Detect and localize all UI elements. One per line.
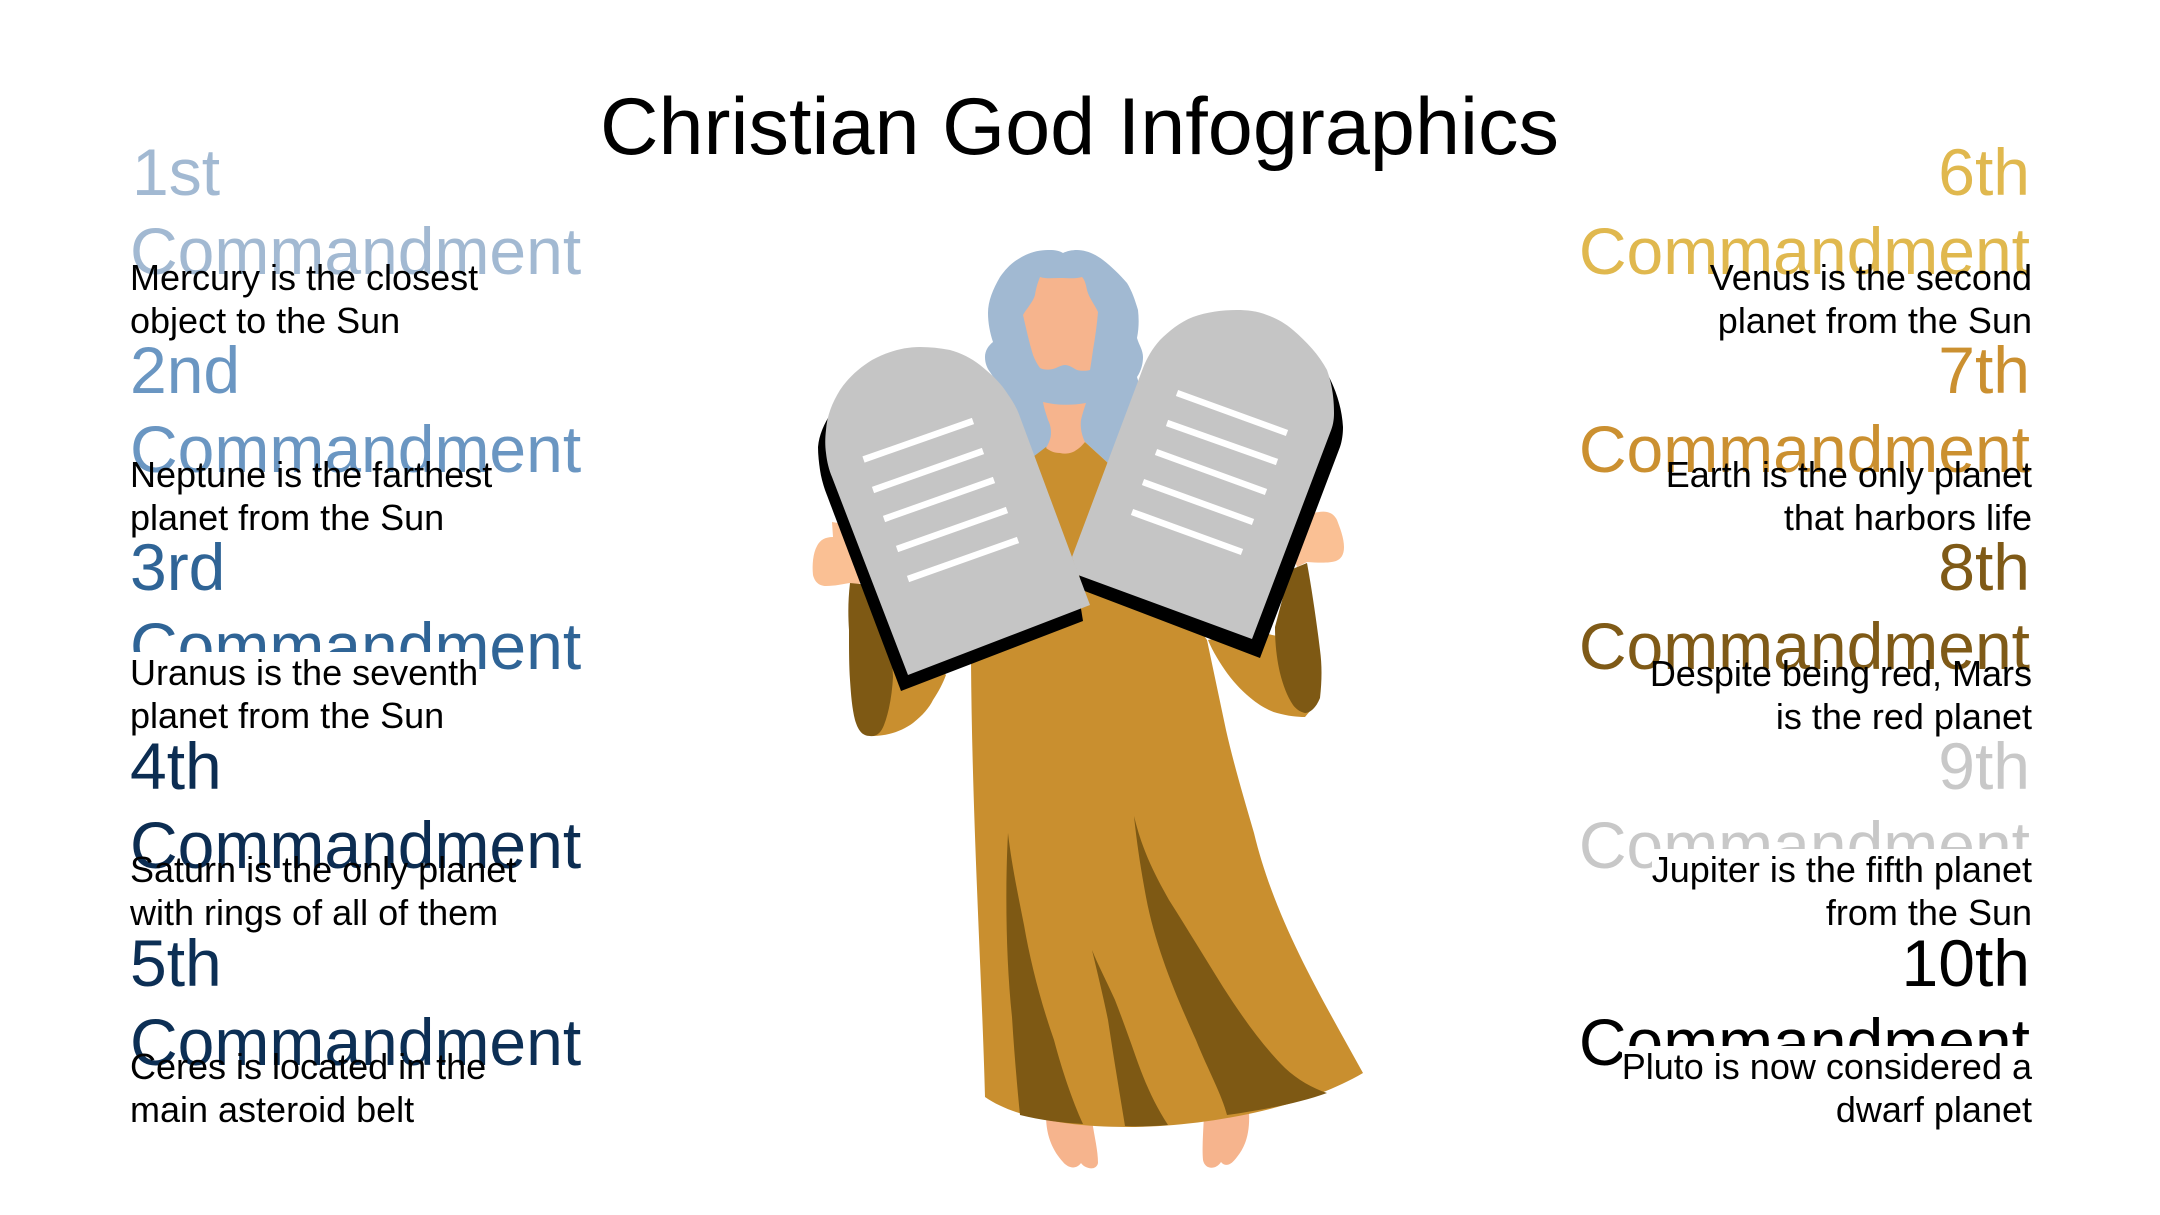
text: 3rd commandment description: Uranus is the seventh	[130, 652, 478, 693]
heading: 6th commandment: Commandment	[1579, 214, 2030, 288]
heading: 5th commandment	[130, 926, 581, 1079]
heading: 6th commandment: 6th	[1938, 134, 2030, 208]
heading: 4th commandment: Commandment	[130, 808, 581, 882]
heading: 10th commandment: 10th	[1902, 926, 2030, 1000]
text: 5th commandment description	[130, 1046, 486, 1130]
icon: right hand	[1285, 512, 1344, 567]
icon: face	[1023, 277, 1098, 371]
text: 3rd commandment description	[130, 652, 478, 736]
icon: left tablet	[818, 347, 1090, 691]
heading: 3rd commandment: Commandment	[130, 609, 581, 683]
heading: 7th commandment: 7th	[1938, 332, 2030, 406]
text: 10th commandment description: Pluto is now considered a	[1622, 1046, 2032, 1087]
text: 1st commandment description	[130, 257, 478, 341]
text: 2nd commandment description: planet from the Sun	[130, 497, 444, 538]
text: 6th commandment description: planet from the Sun	[1718, 300, 2032, 341]
title: Christian God Infographics	[600, 82, 1559, 172]
heading: 8th commandment: 8th	[1938, 530, 2030, 604]
icon: feet	[1046, 1112, 1249, 1168]
heading: 9th commandment: 9th	[1938, 729, 2030, 803]
heading: 2nd commandment: Commandment	[130, 412, 581, 486]
icon: right sleeve	[1208, 563, 1322, 717]
heading: 8th commandment	[1579, 530, 2030, 683]
icon: robe	[971, 442, 1363, 1127]
panel: 1st commandment	[130, 134, 581, 341]
heading: 8th commandment: Commandment	[1579, 609, 2030, 683]
text: 1st commandment description: Mercury is the closest	[130, 257, 478, 298]
text: 7th commandment description: that harbors life	[1784, 497, 2032, 538]
panel: 3rd commandment	[130, 530, 581, 736]
text: 3rd commandment description: planet from the Sun	[130, 695, 444, 736]
heading: 2nd commandment	[130, 332, 581, 486]
panel: 7th commandment	[1579, 332, 2032, 538]
heading: 5th commandment: Commandment	[130, 1005, 581, 1079]
heading: 10th commandment	[1579, 926, 2030, 1079]
heading: 7th commandment: Commandment	[1579, 412, 2030, 486]
text: 9th commandment description: Jupiter is the fifth planet	[1652, 849, 2032, 890]
panel: 9th commandment	[1579, 729, 2032, 933]
icon: neck	[1043, 402, 1086, 454]
icon: right tablet	[1072, 310, 1343, 658]
text: 1st commandment description: object to the Sun	[130, 300, 400, 341]
panel: 10th commandment	[1579, 926, 2032, 1130]
heading: 4th commandment: 4th	[130, 729, 222, 803]
text: 5th commandment description: Ceres is located in the	[130, 1046, 486, 1087]
heading: 9th commandment	[1579, 729, 2030, 882]
icon: robe folds	[1006, 816, 1327, 1126]
text: 4th commandment description: with rings of all of them	[130, 892, 498, 933]
icon: left sleeve	[848, 583, 946, 736]
icon: hair and beard	[985, 250, 1150, 463]
text: 10th commandment description	[1622, 1046, 2032, 1130]
heading: 1st commandment: Commandment	[130, 214, 581, 288]
text: 7th commandment description: Earth is the only planet	[1666, 454, 2032, 495]
panel: 5th commandment	[130, 926, 581, 1130]
text: 2nd commandment description	[130, 454, 492, 538]
text: 9th commandment description	[1652, 849, 2032, 933]
heading: 5th commandment: 5th	[130, 926, 222, 1000]
text: 4th commandment description: Saturn is the only planet	[130, 849, 516, 890]
panel: 2nd commandment	[130, 332, 581, 538]
text: 8th commandment description: Despite being red, Mars	[1650, 653, 2032, 694]
text: 2nd commandment description: Neptune is the farthest	[130, 454, 492, 495]
heading: 9th commandment: Commandment	[1579, 808, 2030, 882]
text: 5th commandment description: main asteroid belt	[130, 1089, 414, 1130]
text: 6th commandment description	[1710, 257, 2032, 341]
heading: 1st commandment: 1st	[132, 134, 220, 208]
heading: 3rd commandment: 3rd	[130, 530, 225, 604]
text: 8th commandment description: is the red planet	[1776, 696, 2032, 737]
heading: 10th commandment: Commandment	[1579, 1005, 2030, 1079]
heading: 7th commandment	[1579, 332, 2030, 486]
heading: 1st commandment	[130, 134, 581, 288]
heading: 3rd commandment	[130, 530, 581, 683]
icon: left hand	[813, 522, 880, 586]
panel: 8th commandment	[1579, 530, 2032, 737]
text: 8th commandment description	[1650, 653, 2032, 737]
heading: 2nd commandment: 2nd	[130, 332, 240, 406]
heading: 6th commandment	[1579, 134, 2030, 288]
panel: 4th commandment	[130, 729, 581, 933]
heading: 4th commandment	[130, 729, 581, 882]
text: 6th commandment description: Venus is the second	[1710, 257, 2032, 298]
panel: 6th commandment	[1579, 134, 2032, 341]
text: 10th commandment description: dwarf planet	[1836, 1089, 2032, 1130]
text: 4th commandment description	[130, 849, 516, 933]
text: 9th commandment description: from the Sun	[1826, 892, 2032, 933]
text: 7th commandment description	[1666, 454, 2032, 538]
